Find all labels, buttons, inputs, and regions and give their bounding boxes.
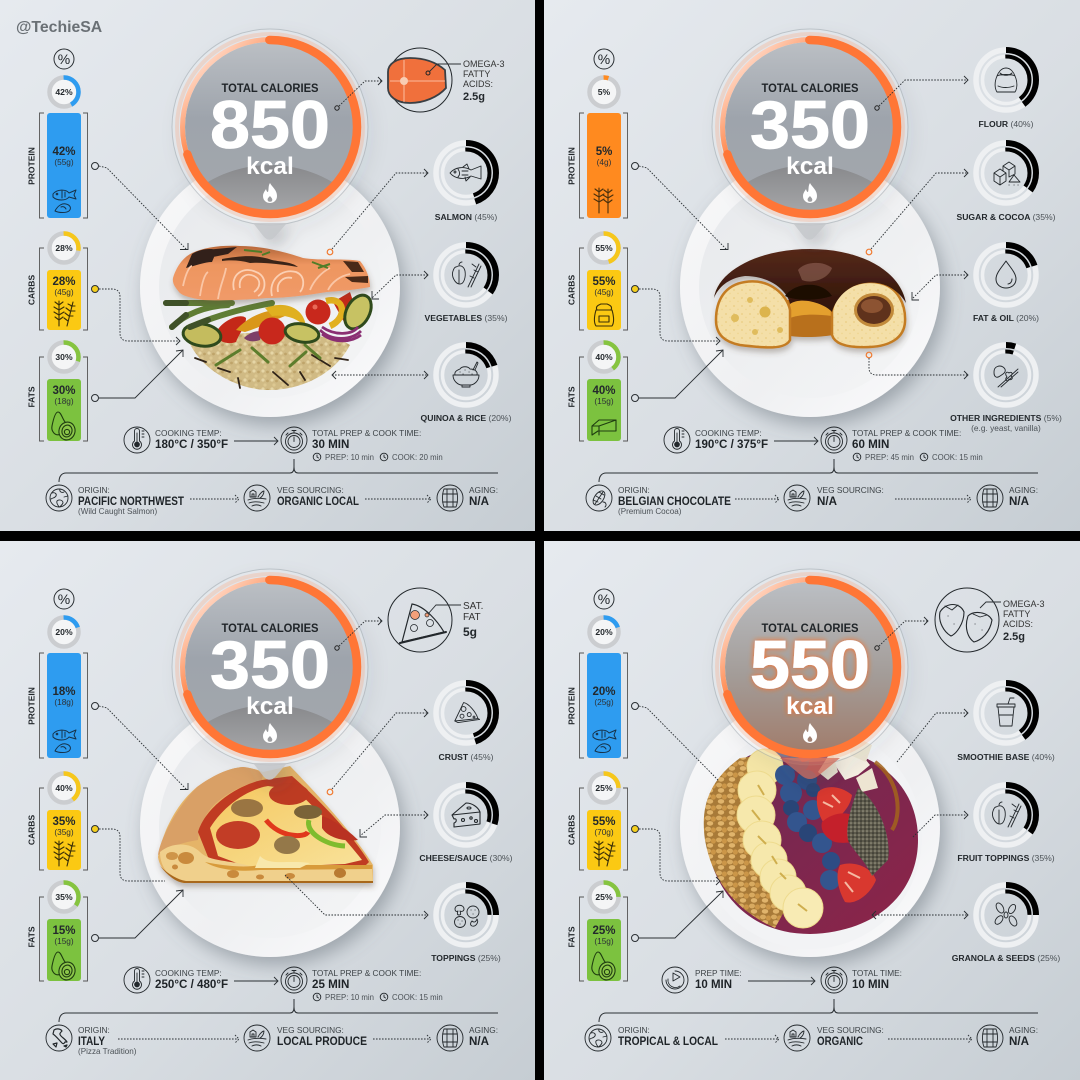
omega-3 callout with salmon steak: 2.5g [463,91,485,103]
calorie text: kcal [786,693,834,720]
aging: N/A [469,1035,490,1048]
ingredient: quinoa and rice: QUINOA & RICE (20%) [421,413,512,423]
origin: ORIGIN: [78,485,110,495]
icon: percent: % [58,591,70,607]
plate [140,157,400,417]
handle: @TechieSA [16,19,102,36]
macro: carbs [26,774,88,870]
food: chocolate donut [714,249,906,347]
bar: protein: PROTEIN [26,687,36,725]
bar: carbs: CARBS [26,275,36,305]
origin: BELGIAN CHOCOLATE [618,495,731,508]
origin: ORIGIN: [618,485,650,495]
calorie text: TOTAL CALORIES [222,622,319,635]
connector: other [866,352,968,379]
connector: carbs [92,826,165,881]
aging: N/A [1009,1035,1030,1048]
icon: percent [54,589,74,609]
row: prep and total time [662,967,902,993]
icon: flame [803,183,817,203]
bar: fats: 30% [52,385,76,397]
ingredient: other: (e.g. yeast, vanilla) [971,423,1041,433]
connector: protein [632,702,719,781]
ingredient: fruit toppings [957,785,1055,863]
cooking temp: COOKING TEMP: [155,968,222,978]
veg sourcing [244,485,359,511]
total time [281,427,443,462]
saturated fat callout with pizza icon: SAT. [463,601,483,612]
connector: carbs [92,286,180,345]
bar: protein: 42% [52,146,76,158]
origin [46,1025,137,1056]
aging [977,485,1038,511]
origin [46,485,184,516]
omega-3 callout with strawberry icon: ACIDS: [1003,619,1033,629]
origin [585,1025,718,1051]
bar: protein: (18g) [54,697,74,707]
total time: COOK: 15 min [392,993,443,1002]
calorie text: 350 [210,627,330,703]
veg sourcing: ORGANIC LOCAL [277,495,359,508]
ingredient: fat and oil: FAT & OIL (20%) [973,313,1039,323]
bar: fats: (15g) [54,936,74,946]
aging [437,1025,498,1051]
bar: protein [26,113,88,218]
callout: total calories [712,28,910,250]
total time: 60 MIN [852,438,889,451]
arrow [735,495,779,503]
connector: salmon [327,169,428,255]
cooking temp: COOKING TEMP: [155,428,222,438]
connector: sugar [866,169,968,255]
ring: fats share: 40% [595,352,613,362]
aging [437,485,498,511]
food: salmon, vegetables and grains [166,246,377,390]
bar: fats: FATS [566,386,576,408]
veg sourcing: VEG SOURCING: [817,1025,884,1035]
veg sourcing: VEG SOURCING: [277,485,344,495]
bar: carbs: 28% [52,276,76,288]
total time: PREP: 45 min [865,453,914,462]
arrow [373,1035,431,1043]
connector: fruit [913,811,968,837]
arrow: prep to total [748,977,815,985]
icon: percent: % [598,51,610,67]
ingredient: toppings: TOPPINGS (25%) [431,953,501,963]
calorie text: 850 [210,87,330,163]
aging: AGING: [469,1025,498,1035]
macro: protein [26,49,88,218]
glass bubble [172,569,368,780]
connector: cheese [360,811,428,837]
bar: protein: PROTEIN [566,687,576,725]
bar: protein: PROTEIN [26,147,36,185]
total time: TOTAL PREP & COOK TIME: [852,428,961,438]
omega-3 callout with salmon steak: ACIDS: [463,79,493,89]
arrow [190,495,239,503]
total time: 30 MIN [312,438,349,451]
bar: fats: 15% [52,925,76,937]
ring: protein share: 42% [55,87,73,97]
ring: fats share: 25% [595,892,613,902]
brace line [59,999,498,1022]
bar: carbs [566,788,628,870]
ring: protein share: 5% [598,87,611,97]
macro: carbs [26,234,88,330]
veg sourcing [784,1025,884,1051]
connector: omega-3 [875,617,928,650]
brace line [599,459,1038,482]
food: pizza slice [158,766,373,883]
total time: TOTAL PREP & COOK TIME: [312,428,421,438]
plate [680,697,940,957]
omega-3 callout with strawberry icon: 2.5g [1003,631,1025,643]
bar: protein: 18% [52,686,76,698]
ingredient: smoothie base: SMOOTHIE BASE (40%) [957,752,1055,762]
connector: carbs [632,286,720,345]
bar: carbs [26,788,88,870]
ring: protein share [590,618,618,646]
omega-3 callout with salmon steak: FATTY [463,69,490,79]
cooking temp: 180°C / 350°F [155,438,228,451]
calorie text: TOTAL CALORIES [762,82,859,95]
arrow [118,1035,239,1043]
omega-3 callout with strawberry icon [935,588,1045,652]
origin [586,485,731,516]
aging: N/A [1009,495,1030,508]
macro: protein [566,589,628,758]
icon: percent: % [58,51,70,67]
bar: fats: (18g) [54,396,74,406]
aging: AGING: [1009,485,1038,495]
calorie text: TOTAL CALORIES [222,82,319,95]
gauge ring [717,574,903,760]
ring: fats share: 35% [55,892,73,902]
bar: fats: 40% [592,385,616,397]
veg sourcing: ORGANIC [817,1035,864,1048]
panel background [544,0,1080,531]
ingredient: salmon [435,143,497,222]
prep time: 10 MIN [695,978,732,991]
veg sourcing [244,1025,367,1051]
bar: carbs [566,248,628,330]
bar: protein: 5% [596,146,612,158]
ingredient: cheese and sauce [419,785,513,863]
icon: flame [803,723,817,743]
ingredient: flour: FLOUR (40%) [979,119,1034,129]
connector: quinoa [332,371,428,379]
ingredient: flour [976,50,1036,129]
macro: carbs [566,234,628,330]
ring: protein share: 20% [55,627,73,637]
connector: fats [632,350,723,402]
arrow [895,495,971,503]
ingredient: vegetables [425,245,508,323]
bar: protein: (25g) [594,697,614,707]
connector: toppings [285,875,428,919]
bar: protein: 20% [592,686,616,698]
ingredient: granola and seeds [952,885,1060,963]
connector: protein [632,162,728,250]
row: origin and sourcing [46,1025,498,1056]
bar: carbs: CARBS [566,815,576,845]
prep time: PREP TIME: [695,968,742,978]
callout: total calories [172,568,370,792]
total time: PREP: 10 min [325,993,374,1002]
prep time [662,967,742,993]
total time [821,427,983,462]
bar: carbs: CARBS [566,275,576,305]
total time: 10 MIN [852,978,889,991]
bar: fats [566,357,628,441]
connector: flour [875,76,968,110]
saturated fat callout with pizza icon [388,588,483,652]
aging [977,1025,1038,1051]
total time: PREP: 10 min [325,453,374,462]
ingredient: other [950,345,1062,433]
ingredient: smoothie base [957,683,1055,762]
ingredient: cheese and sauce: CHEESE/SAUCE (30%) [419,853,513,863]
arrow [725,1035,779,1043]
connector: fat and oil [912,271,968,300]
cooking temp [124,967,228,993]
row: temperature and time [124,967,443,1002]
macro: fats [566,882,628,982]
saturated fat callout with pizza icon: 5g [463,625,477,639]
panel: acai bowl [544,541,1080,1080]
bar: protein: (4g) [597,157,612,167]
cooking temp: 190°C / 375°F [695,438,768,451]
connector: fats [92,350,183,402]
aging: N/A [469,495,490,508]
panel: chocolate donut [544,0,1080,531]
macro: protein [26,589,88,758]
origin: ITALY [78,1035,105,1048]
origin: ORIGIN: [618,1025,650,1035]
ingredient: crust [436,683,496,762]
panel background [0,541,535,1080]
connector: fats [92,890,183,942]
cooking temp [664,427,768,453]
ingredient: sugar and cocoa: SUGAR & COCOA (35%) [956,212,1056,222]
origin: PACIFIC NORTHWEST [78,495,184,508]
bar: carbs: (35g) [54,827,74,837]
plate [140,697,400,957]
bar: carbs [26,248,88,330]
veg sourcing: N/A [817,495,838,508]
bar: fats: 25% [592,925,616,937]
calorie text: TOTAL CALORIES [762,622,859,635]
row: origin and sourcing [585,1025,1038,1051]
arrow: temp to time [234,977,278,985]
bar: fats: (15g) [594,936,614,946]
ingredient: toppings [431,885,501,963]
arrow [365,495,431,503]
ring: carbs share: 25% [595,783,613,793]
row: origin and sourcing [586,485,1038,516]
ingredient: other: OTHER INGREDIENTS (5%) [950,413,1062,423]
icon: percent [54,49,74,69]
origin: (Pizza Tradition) [78,1047,137,1056]
macro: protein [566,49,628,218]
omega-3 callout with salmon steak [388,48,505,112]
bar: protein: PROTEIN [566,147,576,185]
macro: fats [26,882,88,982]
glass bubble [172,29,368,240]
glass bubble [712,29,908,240]
bar: carbs: (70g) [594,827,614,837]
bar: protein [566,113,628,218]
connector: saturated fat [335,617,382,650]
total time [821,967,902,993]
icon: percent: % [598,591,610,607]
ingredient: granola and seeds: GRANOLA & SEEDS (25%) [952,953,1060,963]
ingredient: fruit toppings: FRUIT TOPPINGS (35%) [957,853,1055,863]
calorie text: kcal [246,693,294,720]
icon: percent [594,49,614,69]
bar: carbs: 35% [52,816,76,828]
macro: fats [26,342,88,442]
connector: smoothie [897,709,968,762]
total time: TOTAL TIME: [852,968,902,978]
gauge ring [715,32,905,222]
cooking temp: 250°C / 480°F [155,978,228,991]
saturated fat callout with pizza icon: FAT [463,612,481,623]
gauge ring [175,572,365,762]
total time: COOK: 20 min [392,453,443,462]
ring: protein share [50,618,78,646]
ingredient: vegetables: VEGETABLES (35%) [425,313,508,323]
icon: flame [263,723,277,743]
ring: fats share: 30% [55,352,73,362]
icon: flame [263,183,277,203]
bar: fats: FATS [26,386,36,408]
origin: TROPICAL & LOCAL [618,1035,718,1048]
ring: protein share [590,78,618,106]
bar: protein [566,653,628,758]
bar: fats [566,897,628,982]
brace line [599,999,1038,1022]
connector: vegetables [372,271,428,299]
row: temperature and time [124,427,443,462]
veg sourcing: LOCAL PRODUCE [277,1035,367,1048]
total time: TOTAL PREP & COOK TIME: [312,968,421,978]
veg sourcing [784,485,884,511]
total time: COOK: 15 min [932,453,983,462]
origin: (Premium Cocoa) [618,507,682,516]
panel: salmon meal [0,0,535,531]
cooking temp: COOKING TEMP: [695,428,762,438]
total time [281,967,443,1002]
gauge ring [175,32,365,222]
brace line [59,459,498,482]
ring: protein share [50,78,78,106]
callout: total calories [172,28,370,251]
ingredient: sugar and cocoa [956,143,1056,222]
macro: carbs [566,774,628,870]
cooking temp [124,427,228,453]
calorie text: kcal [786,153,834,180]
arrow [888,1035,972,1043]
bar: carbs: (45g) [54,287,74,297]
origin: (Wild Caught Salmon) [78,507,157,516]
aging: AGING: [1009,1025,1038,1035]
panel background [0,0,535,531]
arrow: temp to time [234,437,278,445]
bar: fats [26,897,88,982]
connector: omega-3 [335,77,382,110]
row: origin and sourcing [46,485,498,516]
plate [680,157,940,417]
ring: carbs share: 55% [595,243,613,253]
connector: protein [92,162,188,250]
ingredient: crust: CRUST (45%) [439,752,494,762]
omega-3 callout with strawberry icon: FATTY [1003,609,1030,619]
icon: percent [594,589,614,609]
aging: AGING: [469,485,498,495]
ingredient: salmon: SALMON (45%) [435,212,497,222]
veg sourcing: VEG SOURCING: [277,1025,344,1035]
veg sourcing: VEG SOURCING: [817,485,884,495]
omega-3 callout with salmon steak: OMEGA-3 [463,59,505,69]
ingredient: quinoa and rice [421,345,512,423]
bar: protein: (55g) [54,157,74,167]
ring: protein share: 20% [595,627,613,637]
origin: ORIGIN: [78,1025,110,1035]
panel background [544,541,1080,1080]
callout: total calories [712,569,908,779]
row: temperature and time [664,427,983,462]
bar: carbs: 55% [592,276,616,288]
connector: protein [92,702,188,790]
calorie text: 550 [750,627,870,703]
ring: carbs share: 40% [55,783,73,793]
macro: fats [566,342,628,441]
bar: fats: FATS [566,926,576,948]
bar: protein [26,653,88,758]
bar: fats: FATS [26,926,36,948]
glass bubble [712,569,908,779]
ring: carbs share: 28% [55,243,73,253]
bar: fats: (15g) [594,396,614,406]
calorie text: kcal [246,153,294,180]
connector: granola [872,911,968,919]
arrow: temp to time [774,437,818,445]
omega-3 callout with strawberry icon: OMEGA-3 [1003,599,1045,609]
bar: carbs: CARBS [26,815,36,845]
total time: 25 MIN [312,978,349,991]
bar: carbs: 55% [592,816,616,828]
bar: carbs: (45g) [594,287,614,297]
ingredient: fat and oil [973,245,1039,323]
calorie text: 350 [750,87,870,163]
panel: pizza slice [0,541,535,1080]
bar: fats [26,357,88,442]
connector: crust [327,709,428,795]
food: acai bowl [704,725,918,934]
connector: fats [632,891,723,942]
connector: carbs [632,826,720,885]
